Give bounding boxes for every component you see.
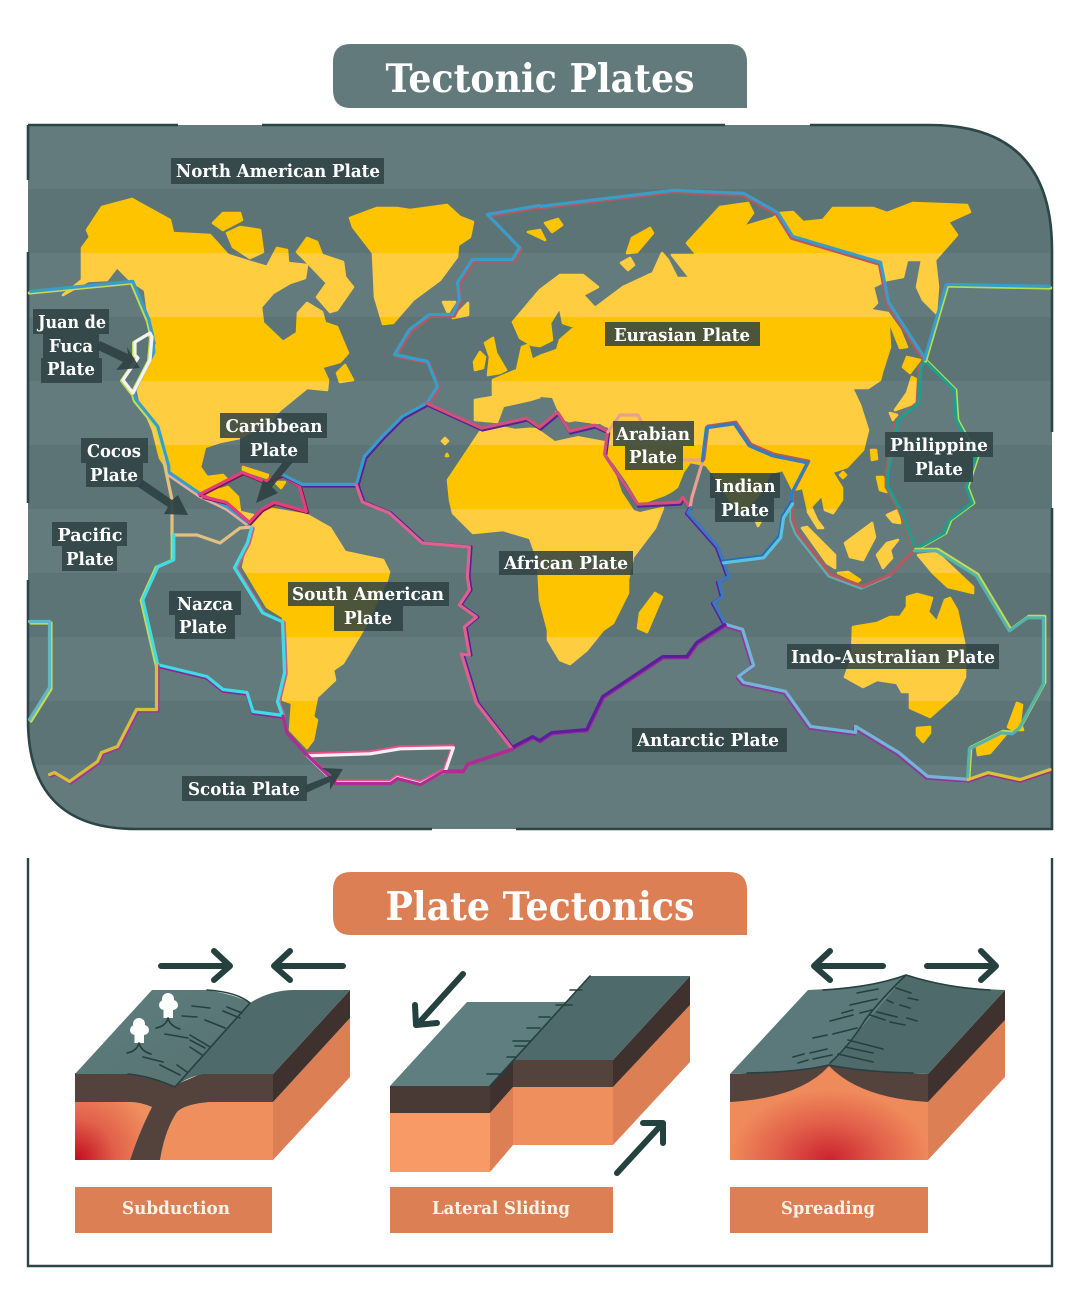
label: Subduction: Subduction <box>122 1198 230 1219</box>
label: South American Plate <box>288 582 449 631</box>
label: Nazca Plate: Nazca <box>177 594 233 615</box>
arrow: to Juan de Fuca Plate <box>96 341 140 370</box>
heading: Plate Tectonics: Plate Tectonics <box>386 884 694 930</box>
land: Greenland <box>350 205 473 324</box>
label: Indian Plate <box>710 473 780 522</box>
left block front <box>390 1113 490 1172</box>
label: Cocos Plate: Cocos <box>87 441 141 462</box>
left block side faces <box>490 1087 513 1172</box>
label: South American Plate: South American <box>292 584 444 605</box>
label: Philippine Plate: Plate <box>915 459 963 480</box>
land: British Isles <box>474 338 506 375</box>
label: Cocos Plate <box>81 438 148 487</box>
label: Indian Plate: Indian <box>714 476 776 497</box>
title: Tectonic Plates <box>333 44 747 108</box>
plate boundary lines <box>29 190 1051 785</box>
landmasses <box>63 199 1023 755</box>
label: Caribbean Plate: Plate <box>250 440 298 461</box>
label: Cocos Plate: Plate <box>90 465 138 486</box>
diagram: lateral sliding block <box>390 976 690 1172</box>
label: Nazca Plate: Plate <box>179 617 227 638</box>
panel: world map of tectonic plates <box>28 125 1052 829</box>
mantle with heat <box>160 1102 273 1160</box>
land: North America <box>63 199 348 523</box>
land: Tasmania and New Zealand <box>917 703 1023 755</box>
land: Arctic islands <box>213 213 353 382</box>
right block top <box>513 976 690 1060</box>
icon: volcano one <box>156 993 180 1029</box>
label: Indo-Australian Plate: Indo-Australian Plate <box>791 647 995 668</box>
seas: Red Sea and Gulf of Aden <box>612 462 695 512</box>
crust and subducting slab <box>75 1073 273 1160</box>
arrow: left, converging <box>274 951 343 980</box>
rift cracks <box>747 975 990 1073</box>
label: Juan de Fuca Plate <box>33 309 109 383</box>
top surface <box>730 975 906 1074</box>
label: Juan de Fuca Plate: Fuca <box>49 336 93 357</box>
side faces <box>273 1018 350 1160</box>
label: Nazca Plate <box>169 591 241 639</box>
seas: Mediterranean <box>503 412 610 441</box>
label: Juan de Fuca Plate: Plate <box>47 359 95 380</box>
arrow: to Cocos Plate <box>138 480 188 515</box>
arrow: to Scotia Plate <box>306 768 343 793</box>
label: Scotia Plate: Scotia Plate <box>188 779 300 800</box>
label: Lateral Sliding: Lateral Sliding <box>432 1198 570 1219</box>
diagram: subduction block <box>75 990 350 1160</box>
label: North American Plate: North American Plate <box>176 161 380 182</box>
land: Africa <box>448 427 663 664</box>
panel: plate tectonics diagrams <box>28 858 1052 1266</box>
label: Spreading <box>730 1187 928 1233</box>
seas: Black Sea <box>540 397 558 412</box>
label: Antarctic Plate: Antarctic Plate <box>636 730 779 751</box>
label: Arabian Plate: Plate <box>629 447 677 468</box>
fault ticks <box>487 976 590 1086</box>
label: South American Plate: Plate <box>344 608 392 629</box>
land: South America <box>243 508 389 748</box>
land: Australia <box>845 594 965 717</box>
title: Tectonic Plates: Tectonic Plates <box>386 56 694 102</box>
label: Subduction <box>75 1187 272 1233</box>
label: Arabian Plate <box>613 421 694 470</box>
arrow: right, converging <box>161 951 230 980</box>
label: Eurasian Plate: Eurasian Plate <box>614 325 750 346</box>
heading: Plate Tectonics <box>333 872 747 935</box>
map ocean background <box>28 125 1052 829</box>
label: Pacific Plate: Plate <box>66 549 114 570</box>
label: Arabian Plate: Arabian <box>615 424 690 445</box>
label: Lateral Sliding <box>390 1187 613 1233</box>
top surface <box>75 990 250 1087</box>
label: Caribbean Plate: Caribbean <box>226 416 322 437</box>
arrow: to Caribbean Plate <box>256 462 293 503</box>
label: African Plate: African Plate <box>503 553 628 574</box>
left block top <box>390 1002 566 1086</box>
arrow: right, diverging <box>927 951 996 980</box>
land: Iceland and Atlantic islands <box>442 302 468 456</box>
label: Pacific Plate <box>52 522 127 571</box>
mantle with heat <box>730 1064 928 1160</box>
icon: volcano two <box>127 1018 151 1054</box>
label: Juan de Fuca Plate: Juan de <box>36 312 106 333</box>
diagram: spreading block <box>730 975 1005 1160</box>
land: Madagascar and Sri Lanka <box>638 521 761 632</box>
right block side faces <box>613 1005 690 1145</box>
cracks <box>128 990 250 1087</box>
crust <box>730 1065 928 1102</box>
land: Southeast Asia and Indonesia <box>802 500 973 593</box>
map panel outline <box>28 125 1052 829</box>
right block front <box>513 1087 613 1145</box>
arrow: left, diverging <box>814 951 883 980</box>
label: Caribbean Plate <box>220 413 327 463</box>
label: Indian Plate: Plate <box>721 500 769 521</box>
land: Arctic Russian islands <box>528 219 653 270</box>
land: Caribbean islands <box>243 467 285 488</box>
land: Japan and East Asian islands <box>840 313 920 492</box>
label: Philippine Plate: Philippine <box>890 435 988 456</box>
label: Pacific Plate: Pacific <box>58 525 123 546</box>
lower panel outline <box>28 858 1052 1266</box>
arrow: down-left <box>415 974 463 1025</box>
label: Spreading: Spreading <box>781 1198 875 1219</box>
side faces <box>928 1020 1005 1160</box>
land: Eurasia <box>475 203 970 513</box>
label: Philippine Plate <box>885 432 993 482</box>
arrow: up-right <box>617 1123 663 1173</box>
